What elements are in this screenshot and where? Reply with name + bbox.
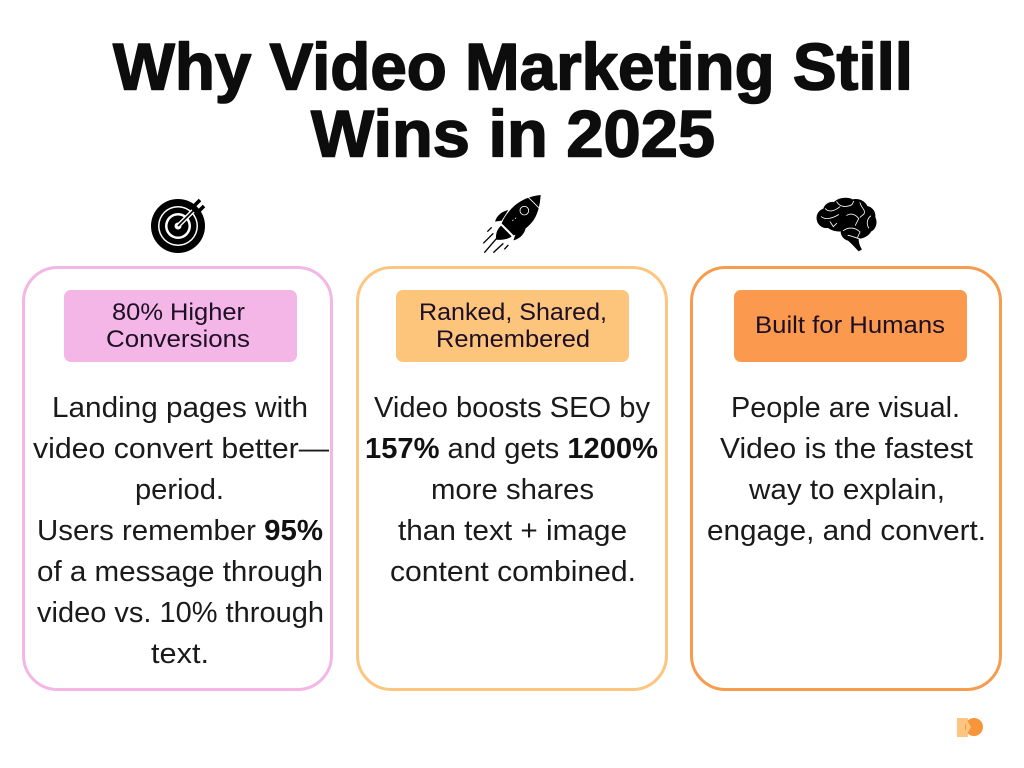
text block: people are visual: Video is the fastest [720,433,973,465]
badge: Built for Humans: Built for Humans [755,312,945,339]
panel: ranked, shared, remembered [358,268,666,690]
text block: landing pages: Users remember 95% [37,515,323,547]
badge: Ranked, Shared, Remembered: Remembered [436,326,590,353]
badge: Ranked, Shared, Remembered: Ranked, Shared, [419,299,607,326]
text block: landing pages: of a message through [37,556,323,588]
text block: video boosts SEO: 157% and gets 1200% [365,433,658,465]
title: Why Video Marketing Still [113,30,913,104]
text block: video boosts SEO: than text + image [398,515,627,547]
text block: landing pages: text. [151,638,209,670]
badge: 80% Higher Conversions: Conversions [106,326,250,353]
text block: landing pages: video vs. 10% through [37,597,324,629]
text block: landing pages: period. [135,474,224,506]
text block: video boosts SEO [365,392,658,588]
title [113,30,913,170]
badge: Built for Humans [734,290,967,362]
icon: target with arrow [151,199,205,253]
text block: landing pages: video convert better— [33,433,330,465]
title: Wins in 2025 [311,96,715,170]
badge: 80% Higher Conversions: 80% Higher [112,299,245,326]
text block: landing pages [33,392,330,670]
text block: people are visual [707,392,986,547]
icon: brain [817,198,877,251]
text block: landing pages: Landing pages with [52,392,308,424]
text block: people are visual: People are visual. [731,392,960,424]
badge: 80% Higher Conversions [64,290,297,362]
text block: people are visual: way to explain, [748,474,945,506]
text block: people are visual: engage, and convert. [707,515,986,547]
badge: Ranked, Shared, Remembered [396,290,629,362]
text block: video boosts SEO: more shares [431,474,594,506]
panel: 80% higher conversions [24,268,332,690]
text block: video boosts SEO: Video boosts SEO by [374,392,651,424]
text block: video boosts SEO: content combined. [390,556,636,588]
icon: brand logo [957,718,983,737]
icon: rocket [483,195,541,253]
panel: built for humans [692,268,1000,690]
